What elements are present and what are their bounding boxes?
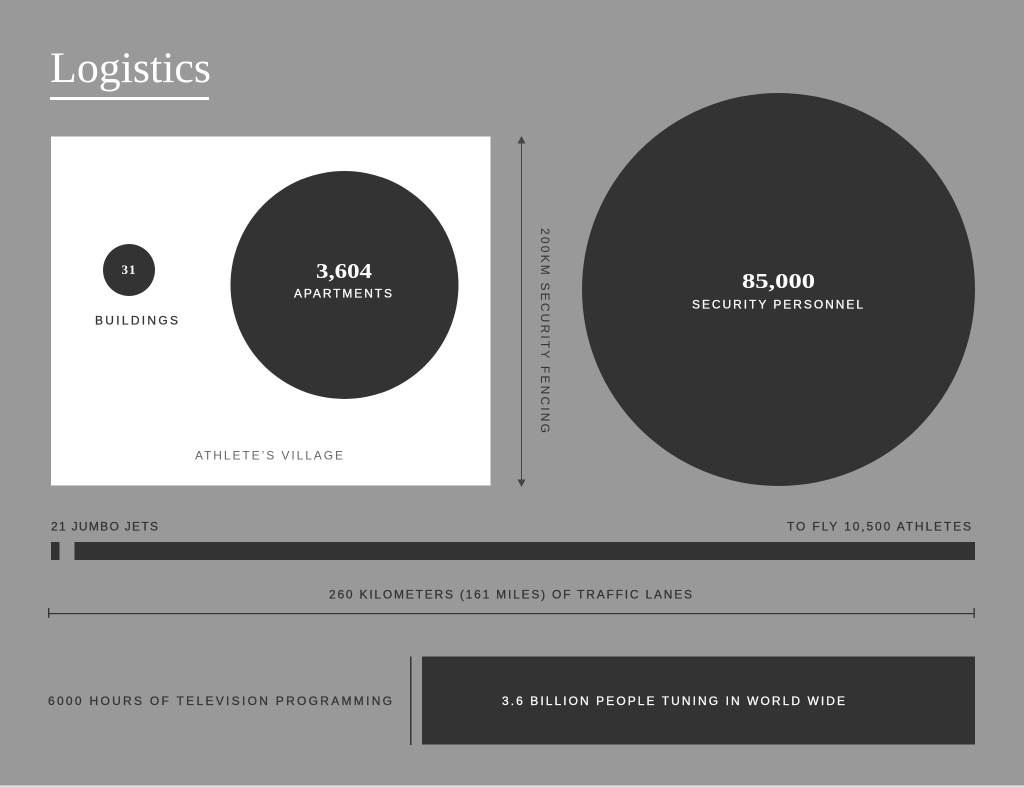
traffic lanes measure [48, 608, 975, 618]
label: buildings: BUILDINGS [95, 314, 178, 328]
security personnel circle [582, 93, 975, 486]
apartments circle: 3,604 [316, 259, 373, 283]
title: Logistics [50, 45, 211, 92]
bar: viewers: 3.6 BILLION PEOPLE TUNING IN WORLD WIDE [502, 694, 845, 708]
label: security fencing: 200KM SECURITY FENCING [538, 228, 552, 433]
arrow: security fencing span [518, 136, 526, 487]
icon: buildings circle [103, 244, 155, 296]
bar: athletes [74, 542, 975, 560]
icon: buildings circle: 31 [122, 262, 136, 277]
athletes label: TO FLY 10,500 ATHLETES [787, 520, 971, 534]
television label: 6000 HOURS OF TELEVISION PROGRAMMING [48, 694, 392, 708]
security personnel circle: 85,000 [742, 269, 815, 293]
security personnel circle: SECURITY PERSONNEL [692, 298, 863, 312]
apartments circle: APARTMENTS [294, 286, 392, 300]
bar: viewers [422, 656, 975, 744]
traffic lanes label: 260 KILOMETERS (161 MILES) OF TRAFFIC LANES [329, 588, 692, 602]
panel: athlete's village [51, 136, 490, 486]
label: athlete's village: ATHLETE’S VILLAGE [195, 448, 343, 462]
bar: jets [51, 542, 60, 560]
divider bar [410, 656, 412, 745]
jumbo jets label: 21 JUMBO JETS [51, 520, 158, 534]
apartments circle [230, 171, 458, 399]
